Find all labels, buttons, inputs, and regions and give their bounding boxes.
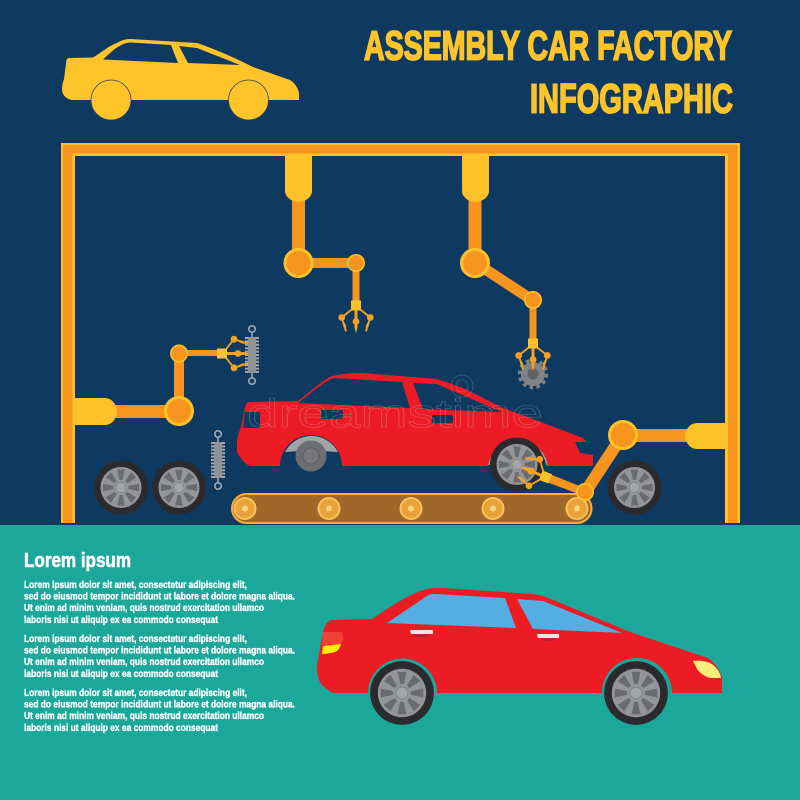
background: navy factory area	[0, 0, 800, 525]
text block: paragraphs: Lorem ipsum dolor sit amet, consectetur adipiscing elit,	[24, 687, 247, 699]
text block: paragraphs: Lorem ipsum dolor sit amet, consectetur adipiscing elit,	[24, 579, 247, 591]
text block: paragraphs: Ut enim ad minim veniam, quis nostrud exercitation ullamco	[24, 656, 264, 668]
text block: paragraphs: sed do eiusmod tempor incididunt ut labore et dolore magna aliqua.	[24, 644, 295, 656]
robot arm: right	[513, 422, 725, 500]
text block: paragraphs	[24, 579, 295, 734]
gear	[520, 360, 546, 388]
robot arm: top left	[285, 156, 374, 334]
spare wheels	[94, 460, 662, 514]
text block: paragraphs: laboris nisi ut aliquip ex ea commodo consequat	[24, 668, 218, 680]
watermark: dreamstime	[247, 392, 543, 436]
conveyor belt	[232, 494, 592, 523]
watermark	[247, 375, 543, 436]
text block: paragraphs: laboris nisi ut aliquip ex ea commodo consequat	[24, 722, 218, 734]
factory frame	[61, 143, 740, 523]
background: teal info area	[0, 525, 800, 800]
text block: paragraphs: Lorem ipsum dolor sit amet, consectetur adipiscing elit,	[24, 633, 247, 645]
icon: yellow car silhouette	[62, 39, 299, 120]
title	[364, 22, 733, 122]
red car on assembly line	[237, 373, 593, 492]
text block: paragraphs: laboris nisi ut aliquip ex ea commodo consequat	[24, 614, 218, 626]
spring: on floor	[215, 431, 221, 489]
text block: paragraphs: sed do eiusmod tempor incididunt ut labore et dolore magna aliqua.	[24, 698, 295, 710]
text block: paragraphs: Ut enim ad minim veniam, quis nostrud exercitation ullamco	[24, 602, 264, 614]
spring: held by left arm	[249, 326, 255, 384]
robot arm: left	[75, 336, 250, 425]
text block: paragraphs: sed do eiusmod tempor incididunt ut labore et dolore magna aliqua.	[24, 590, 295, 602]
heading: Lorem ipsum: Lorem ipsum	[24, 550, 131, 572]
finished red car	[317, 588, 722, 725]
text block: paragraphs: Ut enim ad minim veniam, quis nostrud exercitation ullamco	[24, 710, 264, 722]
robot arm: top right	[462, 156, 551, 372]
